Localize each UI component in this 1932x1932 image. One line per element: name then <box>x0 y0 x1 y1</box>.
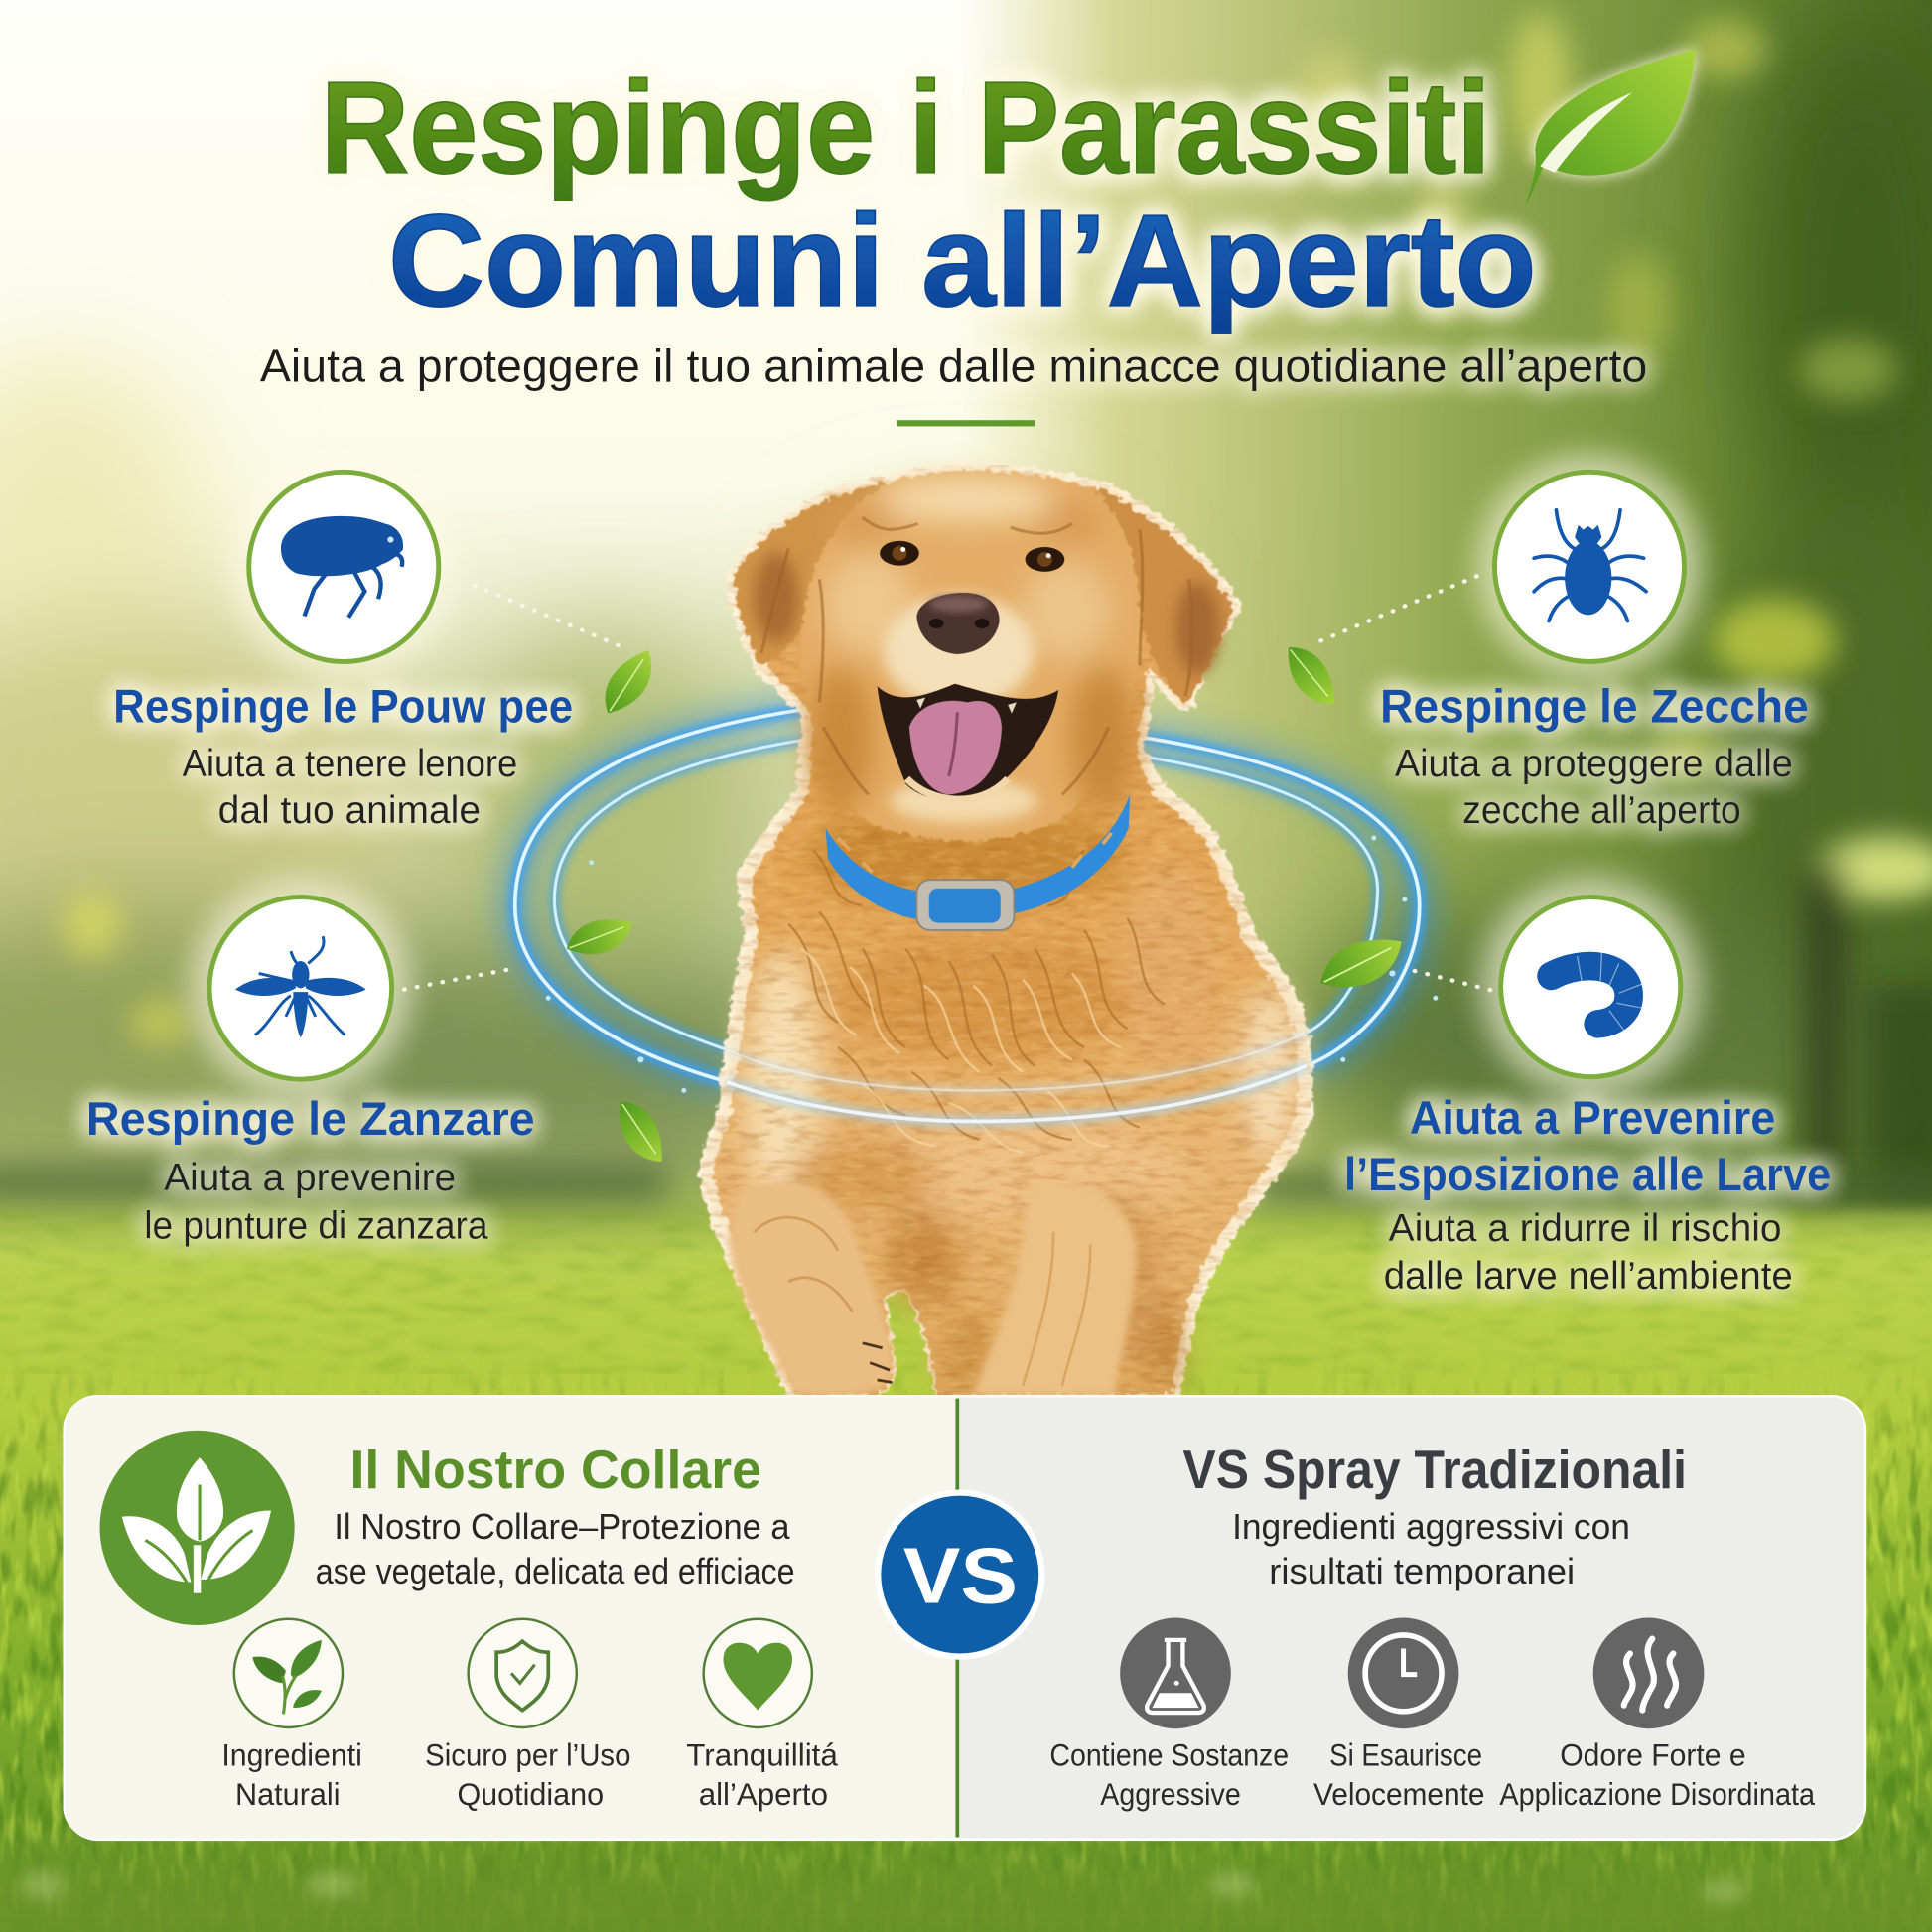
description: larva: dalle larve nell’ambiente <box>1384 1255 1793 1298</box>
feature: safe daily use <box>469 1619 577 1727</box>
label: safe daily use: Sicuro per l’Uso <box>425 1737 630 1772</box>
label: aggressive substances <box>1049 1737 1289 1812</box>
feature: strong odour <box>1593 1618 1704 1728</box>
heading: our collar: Il Nostro Collare <box>349 1440 761 1500</box>
dog head and ears <box>736 470 1232 841</box>
heading: larva: l’Esposizione alle Larve <box>1344 1148 1831 1200</box>
heading: larva: Aiuta a Prevenire <box>1410 1091 1775 1144</box>
description: tick: Aiuta a proteggere dalle <box>1395 743 1793 785</box>
description: tick: zecche all’aperto <box>1462 789 1741 832</box>
dog silhouette <box>701 466 1311 1397</box>
panel: mosquito <box>86 878 535 1247</box>
raised front paw <box>730 1181 893 1395</box>
description: traditional sprays: risultati temporanei <box>1269 1551 1575 1591</box>
icon: large green leaf <box>1525 50 1696 206</box>
description: larva: Aiuta a ridurre il rischio <box>1389 1207 1782 1250</box>
label: safe daily use <box>425 1737 630 1812</box>
icon: larva <box>1480 876 1702 1098</box>
description: mosquito <box>144 1157 488 1247</box>
feature: aggressive substances <box>1120 1618 1231 1728</box>
description: flea: Aiuta a tenere lenore <box>183 743 517 785</box>
label: safe daily use: Quotidiano <box>457 1777 604 1812</box>
description: our collar: ase vegetale, delicata ed efficiace <box>316 1551 794 1591</box>
description: traditional sprays <box>1232 1506 1630 1591</box>
feature: runs out quickly <box>1348 1618 1458 1728</box>
grass blades <box>0 1355 1932 1932</box>
label: outdoor peace of mind <box>686 1737 839 1812</box>
panel: tick <box>1380 454 1809 832</box>
front leg <box>973 1183 1136 1395</box>
label: runs out quickly: Velocemente <box>1313 1777 1484 1812</box>
title <box>321 55 1537 334</box>
dotted connectors <box>404 573 1493 991</box>
title line 1: Respinge i Parassiti <box>321 55 1491 201</box>
label: aggressive substances: Contiene Sostanze <box>1049 1737 1289 1772</box>
divider <box>955 1399 959 1837</box>
label: strong odour: Applicazione Disordinata <box>1499 1777 1816 1812</box>
icon: flea <box>230 454 457 680</box>
label: natural ingredients: Naturali <box>235 1777 341 1812</box>
heading: mosquito: Respinge le Zanzare <box>86 1092 535 1145</box>
description: mosquito: le punture di zanzara <box>144 1204 488 1247</box>
description: larva <box>1384 1207 1793 1298</box>
heading: flea: Respinge le Pouw pee <box>113 679 573 732</box>
nose <box>916 593 1000 654</box>
title line 2: Comuni all’Aperto <box>388 188 1537 334</box>
ring in front of the dog <box>727 1033 1307 1121</box>
golden retriever with blue collar <box>701 466 1311 1397</box>
description: tick <box>1395 743 1793 832</box>
icon: mosquito <box>190 878 412 1099</box>
label: natural ingredients: Ingredienti <box>221 1737 362 1772</box>
VS badge <box>875 1489 1044 1660</box>
label: runs out quickly <box>1313 1737 1484 1812</box>
heading: tick: Respinge le Zecche <box>1380 679 1809 732</box>
description: our collar: Il Nostro Collare–Protezione a <box>334 1506 790 1547</box>
VS badge: VS <box>903 1532 1018 1620</box>
label: outdoor peace of mind: all’Aperto <box>699 1777 828 1812</box>
panel: comparison <box>65 1396 1865 1840</box>
heading: traditional sprays: VS Spray Tradizionali <box>1182 1440 1687 1500</box>
label: strong odour: Odore Forte e <box>1560 1737 1746 1772</box>
description: our collar <box>316 1506 794 1591</box>
icon: plant badge <box>100 1431 295 1625</box>
feature: outdoor peace of mind <box>704 1619 812 1727</box>
open mouth and tongue <box>878 684 1058 800</box>
description: traditional sprays: Ingredienti aggressivi con <box>1232 1506 1630 1547</box>
divider under subtitle <box>897 420 1035 426</box>
label: runs out quickly: Si Esaurisce <box>1329 1737 1482 1772</box>
subtitle: Aiuta a proteggere il tuo animale dalle minacce quotidiane all’aperto <box>260 341 1647 392</box>
blue protective rings behind the dog <box>515 700 1438 1093</box>
description: flea: dal tuo animale <box>218 789 481 832</box>
panel: larva <box>1344 876 1831 1298</box>
label: natural ingredients <box>221 1737 362 1812</box>
floating leaves <box>566 646 1403 1163</box>
label: strong odour <box>1499 1737 1816 1812</box>
panel background <box>65 1396 1865 1840</box>
icon: tick <box>1476 454 1703 680</box>
heading: larva <box>1344 1091 1831 1200</box>
feature: natural ingredients <box>234 1619 343 1727</box>
panel: flea <box>113 454 573 832</box>
label: aggressive substances: Aggressive <box>1100 1777 1241 1812</box>
description: mosquito: Aiuta a prevenire <box>164 1157 456 1199</box>
label: outdoor peace of mind: Tranquillitá <box>686 1737 839 1772</box>
description: flea <box>183 743 517 832</box>
blue collar with buckle <box>826 794 1130 930</box>
eyes <box>880 541 1064 572</box>
